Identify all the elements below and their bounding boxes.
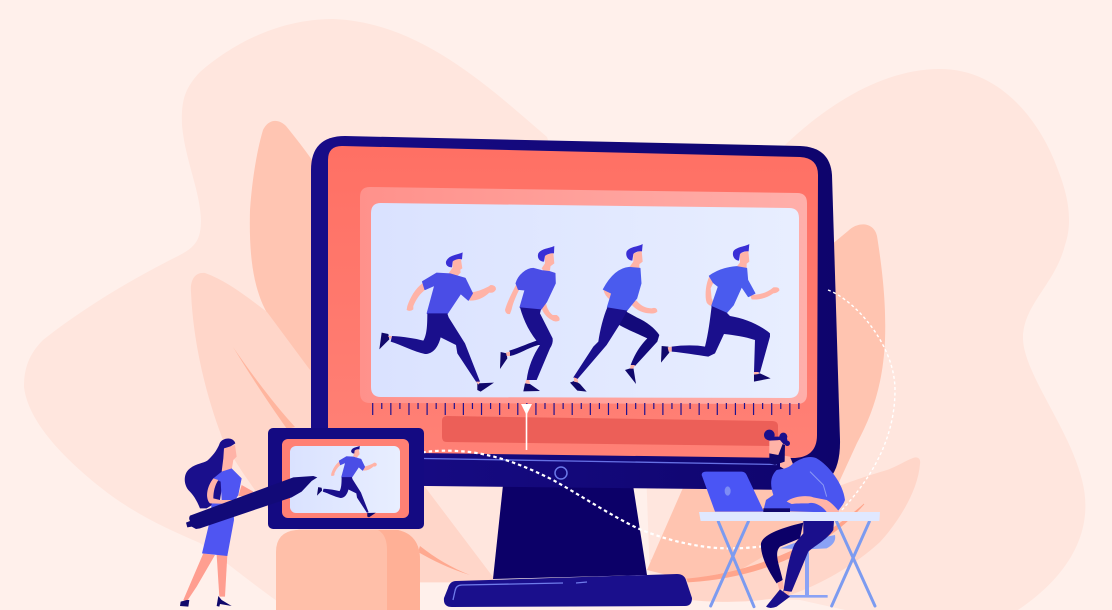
background blob: right [640, 69, 1085, 610]
tablet [268, 428, 424, 529]
runner 3 [570, 244, 659, 392]
monitor stand [493, 485, 647, 579]
man at desk [699, 430, 880, 608]
runner 4 [661, 244, 779, 382]
woman with stylus [180, 438, 317, 607]
leaf: lower left [191, 273, 493, 582]
screen inner panel [360, 187, 807, 404]
pedestal under tablet [276, 530, 420, 610]
screen canvas [371, 203, 799, 398]
leaf: upper left [250, 121, 330, 380]
tablet runner [317, 446, 377, 517]
monitor power button [555, 467, 567, 479]
monitor frame [311, 136, 840, 490]
dotted motion path: upper [828, 290, 895, 512]
background blob: left [24, 19, 600, 610]
runner 1 [379, 252, 496, 392]
leaf vein: lower left [418, 546, 470, 575]
leaf vein: right [687, 504, 864, 582]
runner 2 [500, 246, 560, 391]
leaf: right upper [647, 224, 885, 580]
monitor screen [328, 146, 818, 458]
stylus [186, 476, 317, 529]
timeline ruler [373, 403, 799, 415]
timeline track [442, 416, 778, 446]
monitor light strip [424, 458, 777, 464]
leaf: right lower [650, 457, 920, 602]
leaf vein: left [233, 347, 295, 429]
dotted motion path: lower [416, 451, 765, 548]
playhead marker [521, 404, 532, 450]
monitor stand base [444, 574, 692, 607]
